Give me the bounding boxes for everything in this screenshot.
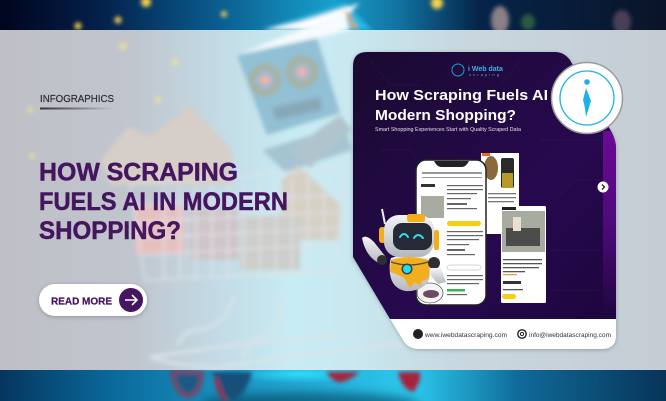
background: bottom band [0,365,666,401]
brand logo: i Web data [468,66,503,73]
card heading: Modern Shopping? [375,108,516,124]
social post card [353,52,616,349]
footer contact: website [413,329,507,339]
background: top band [0,0,666,34]
product card: oil bottle [481,153,519,234]
icon: arrow [119,288,143,312]
faded cart [135,205,185,255]
faded parcels [100,105,232,185]
label: infographics: INFOGRAPHICS [40,93,114,105]
footer contact: website: www.iwebdatascraping.com [424,332,507,339]
phone mockup [416,160,486,305]
footer contact: email [518,330,611,339]
footer contact: email: info@iwebdatascraping.com [529,332,611,339]
product card: rack [501,206,546,303]
brand logo [452,64,503,77]
card white base [353,52,616,349]
title: SHOPPING? [39,217,181,245]
title: FUELS AI IN MODERN [39,188,288,216]
card subheading: Smart Shopping Experiences Start with Quality Scraped Data [375,127,522,133]
title: HOW SCRAPING [39,158,238,186]
read more button: READ MORE [51,296,112,308]
purple edge strip [603,131,616,319]
brand logo: scraping [469,72,499,77]
card purple body [353,52,616,319]
next arrow button [598,182,608,192]
product thumbnail beside robot [417,283,443,303]
faint circuit lines [370,60,600,290]
faded robot [237,12,350,55]
label: infographics [40,93,114,110]
read more button [39,284,147,316]
card heading: How Scraping Fuels AI i [375,88,557,104]
robot mascot [362,209,446,291]
round brand badge [552,62,622,134]
